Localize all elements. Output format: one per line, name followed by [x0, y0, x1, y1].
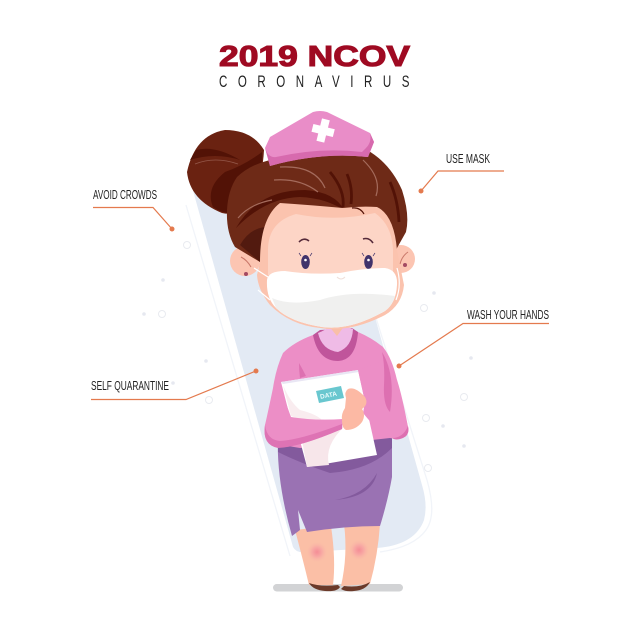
callout: use mask [418, 152, 504, 194]
decorative dots [142, 242, 473, 472]
skirt shadow [278, 425, 392, 500]
face highlight [268, 213, 393, 275]
callout: wash your hands: WASH YOUR HANDS [467, 308, 549, 322]
legs [295, 524, 380, 586]
hair highlights [238, 160, 377, 218]
data tag: DATA [320, 391, 338, 401]
title: 2019 NCOV [219, 41, 411, 73]
ear details [241, 252, 408, 267]
hair back [227, 150, 407, 262]
clipboard paper [281, 370, 377, 467]
bun highlight [195, 160, 238, 164]
nurse figure [187, 111, 415, 591]
skirt [278, 430, 392, 536]
sleeve fold shade [299, 352, 408, 440]
eyelashes [299, 253, 375, 256]
arm shade [265, 424, 342, 448]
far arm over clipboard [358, 362, 408, 438]
hair bun [187, 130, 264, 214]
earrings [244, 263, 407, 276]
shoes [309, 582, 370, 591]
data tag [316, 386, 344, 403]
sweater torso and arms [265, 332, 408, 448]
hands [342, 388, 366, 430]
eyes [301, 255, 373, 269]
callout: use mask: USE MASK [446, 152, 490, 166]
subtitle: CORONAVIRUS [219, 73, 409, 92]
hair sideburn shade [240, 227, 266, 262]
eyebrows [299, 238, 373, 243]
callout: self quarantine [91, 368, 258, 400]
near arm over clipboard [265, 395, 343, 447]
face [257, 203, 404, 329]
callout: avoid crowds: AVOID CROWDS [93, 188, 157, 202]
collar [313, 325, 358, 361]
callout: wash your hands [396, 308, 549, 368]
face mask [267, 268, 397, 328]
hair dark strands [330, 172, 399, 222]
ears [230, 245, 415, 276]
hair dark swoop [236, 190, 344, 228]
forelock line [352, 208, 364, 214]
bun shade [190, 149, 262, 213]
callout: avoid crowds [93, 188, 174, 232]
background panel [186, 180, 432, 556]
callout: self quarantine: SELF QUARANTINE [91, 379, 169, 393]
nurse cap [265, 111, 374, 166]
mask straps [254, 268, 399, 300]
ground shadow [273, 584, 403, 592]
